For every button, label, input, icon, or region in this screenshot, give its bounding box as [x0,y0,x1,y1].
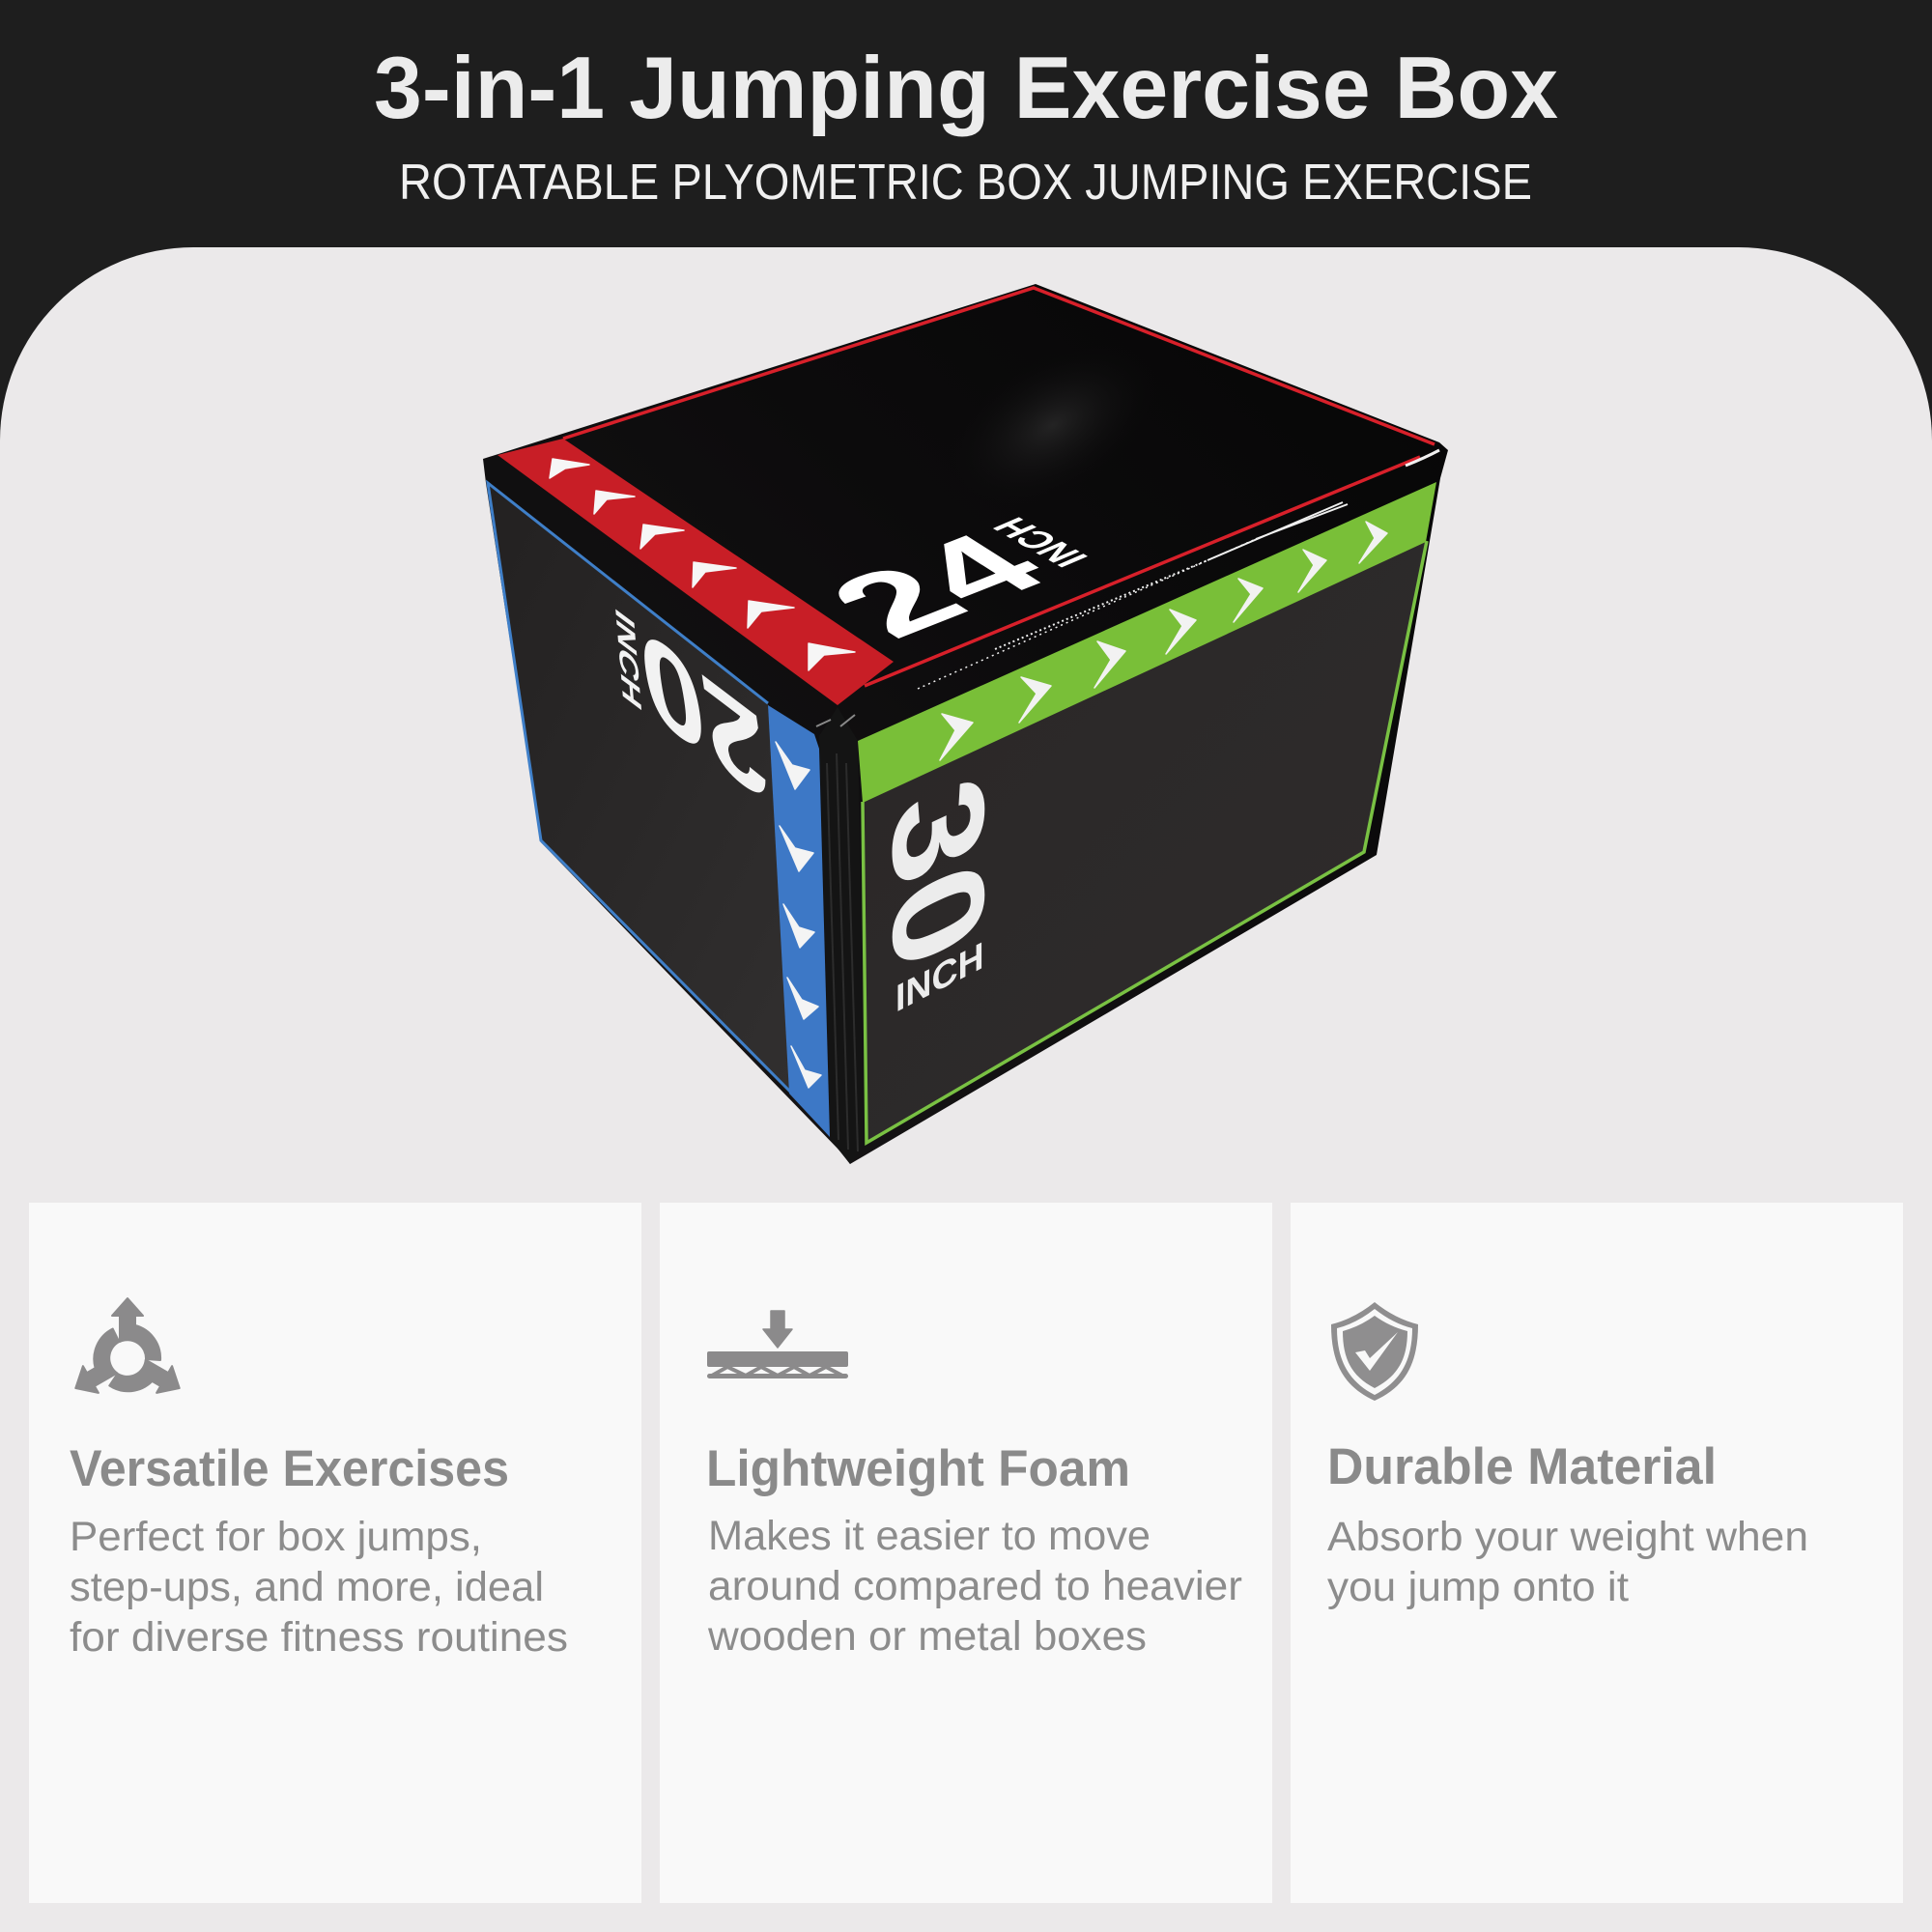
heading: Versatile Exercises [70,1440,509,1497]
panel: lightweight foam [660,1203,1272,1903]
body text [707,1513,1242,1660]
green arrows [940,522,1387,760]
left face panel [488,483,830,1137]
label: 20 INCH: 20 [631,596,778,836]
body text: step-ups, and more, ideal [70,1564,544,1610]
zipper stitching [918,450,1439,689]
body text [1327,1514,1808,1610]
label: 24 INCH: 24 [796,515,1078,655]
red arrows [550,459,855,670]
icon: three rotating arrows [59,1298,187,1417]
panel: versatile exercises [29,1203,641,1903]
blue outline [488,483,790,1092]
green outline [863,541,1427,1143]
subtitle: ROTATABLE PLYOMETRIC BOX JUMPING EXERCISE [399,155,1532,211]
header band [0,0,1932,454]
front corner post [816,707,867,1164]
icon: pressure on foam [707,1311,848,1378]
right face panel [858,482,1436,1143]
body text: Absorb your weight when [1327,1514,1808,1560]
green strip [858,482,1436,803]
top face sheen [919,308,1187,542]
label: 24 INCH: INCH [984,512,1098,572]
heading: Durable Material [1327,1438,1717,1495]
red outline [563,288,1435,686]
body text: Perfect for box jumps, [70,1514,482,1560]
red strip [497,439,894,705]
heading: Lightweight Foam [706,1440,1130,1497]
body text [70,1514,568,1661]
blue strip [768,705,830,1137]
box silhouette [483,284,1448,1164]
label: 30 INCH: INCH [895,933,984,1021]
label: 30 INCH: 30 [866,754,1011,992]
body text: around compared to heavier [708,1563,1242,1609]
label: 20 INCH: INCH [610,602,648,718]
icon: shield with check [1331,1302,1418,1401]
body text: Makes it easier to move [708,1513,1151,1559]
top face markings [497,288,1439,705]
plyometric box product illustration [483,284,1448,1164]
title: 3-in-1 Jumping Exercise Box [374,40,1558,137]
body text: you jump onto it [1327,1564,1629,1610]
body text: wooden or metal boxes [707,1613,1147,1660]
blue arrows [776,742,821,1088]
panel: durable material [1291,1203,1903,1903]
body text: for diverse fitness routines [70,1614,568,1661]
